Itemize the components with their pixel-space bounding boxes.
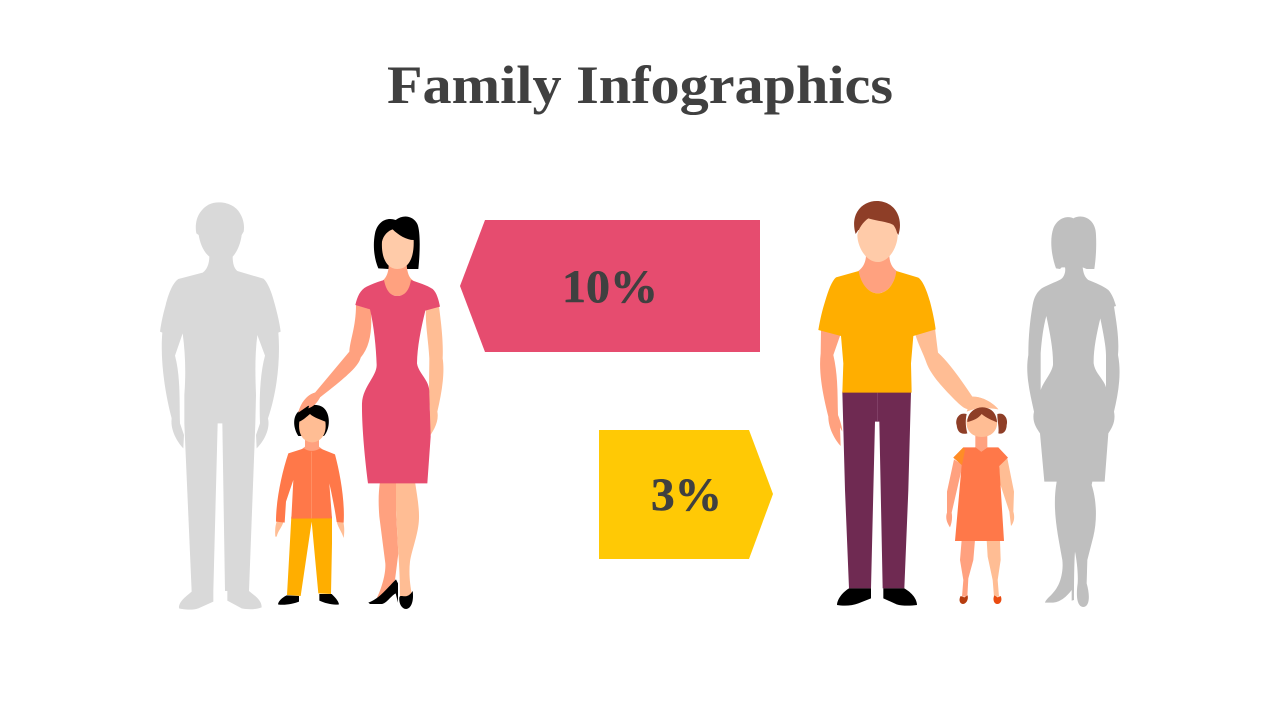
3% value: 3% <box>651 469 722 521</box>
pink arrow banner <box>460 220 760 352</box>
grey silhouette gaps <box>1041 316 1053 390</box>
grey man silhouette <box>160 202 281 610</box>
title: Family Infographics <box>387 55 893 115</box>
girl legs <box>960 540 975 597</box>
man hair <box>854 201 900 235</box>
yellow arrow banner <box>599 430 773 559</box>
woman face <box>382 229 414 269</box>
woman legs <box>377 482 398 598</box>
woman hair <box>374 217 420 269</box>
girl right arm <box>999 458 1014 526</box>
man hand on girl head <box>967 397 998 412</box>
right family group <box>818 201 1120 607</box>
man neck <box>858 255 897 293</box>
man trousers <box>842 392 911 588</box>
woman left arm <box>298 305 371 413</box>
boy shirt seam <box>311 452 313 518</box>
woman right arm <box>426 307 443 439</box>
man shoes <box>837 588 871 606</box>
boy neck <box>301 438 323 453</box>
boy shoes <box>278 595 299 605</box>
man in yellow shirt <box>818 201 998 606</box>
girl hair <box>967 407 997 422</box>
grey woman silhouette <box>1027 216 1120 607</box>
girl sleeve <box>953 447 965 465</box>
man left arm <box>820 330 842 446</box>
boy hands <box>275 522 283 537</box>
man right arm <box>915 328 998 410</box>
boy trousers <box>287 517 332 596</box>
girl face <box>967 413 997 437</box>
woman neck <box>383 265 413 296</box>
woman in pink dress <box>298 217 443 609</box>
boy face <box>299 414 326 442</box>
woman shoes <box>368 579 398 604</box>
woman dress <box>355 280 440 483</box>
boy shirt <box>276 448 344 523</box>
girl shoes <box>960 595 968 604</box>
trouser seam <box>876 393 878 422</box>
girl neck <box>975 435 987 452</box>
girl pigtails <box>956 414 967 434</box>
left family group <box>160 202 443 610</box>
boy hair <box>294 405 329 436</box>
woman hand on boy head <box>298 393 320 413</box>
girl <box>946 397 1014 604</box>
man face <box>857 218 898 262</box>
boy <box>275 393 344 605</box>
man shirt <box>818 271 936 393</box>
girl dress <box>953 447 1008 541</box>
10% value: 10% <box>562 261 658 313</box>
girl left arm <box>946 459 963 527</box>
